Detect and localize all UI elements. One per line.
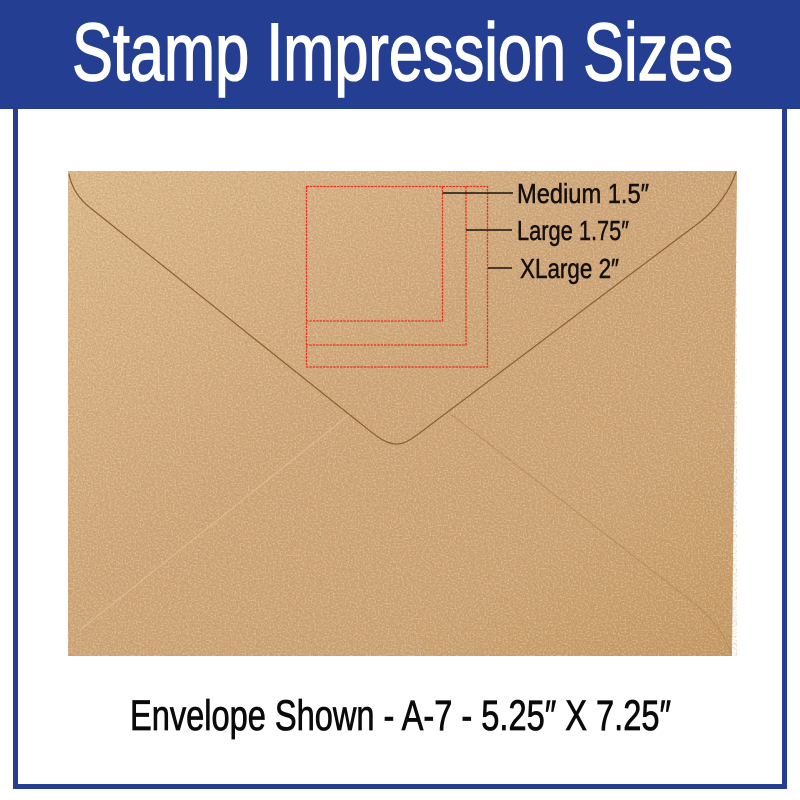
envelope body: [68, 171, 737, 656]
medium size label: Medium 1.5″: [517, 178, 649, 209]
envelope: [68, 171, 737, 656]
xlarge size label: [488, 253, 619, 284]
envelope flap edge: [69, 172, 736, 444]
header band: [0, 0, 800, 109]
large leader line: [466, 229, 512, 231]
xlarge outline: [306, 186, 488, 367]
large outline: [306, 186, 466, 345]
xlarge leader line: [488, 267, 512, 269]
large size label: Large 1.75″: [517, 215, 629, 246]
medium leader line: [442, 192, 513, 194]
xlarge size label: XLarge 2″: [520, 253, 619, 284]
medium outline: [306, 186, 442, 321]
light paper grain: [68, 171, 737, 656]
lower left fold line: [80, 414, 350, 630]
dark paper grain: [68, 171, 737, 656]
stamp impression outlines: [306, 186, 488, 367]
lower right fold line: [452, 415, 731, 654]
